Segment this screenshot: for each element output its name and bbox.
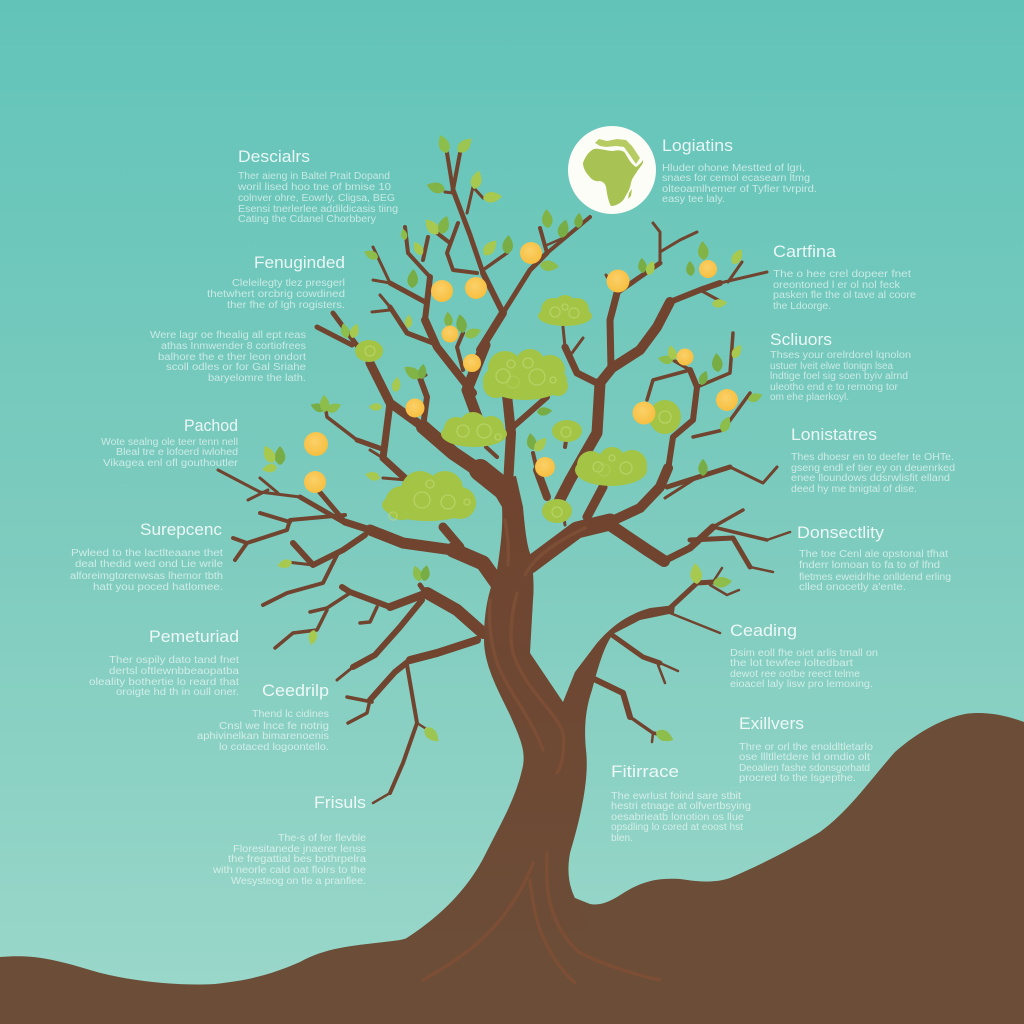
foliage clumps [355, 295, 681, 523]
text block: Surepcenc [70, 520, 223, 593]
text block: Fenuginded: ther fhe of lgh rogisters. [227, 300, 345, 311]
text block: Scliuors: uleotho end e to rernong tor [770, 382, 899, 393]
text block: Pachod: Bleal tre e lofoerd iwlohed [116, 447, 238, 458]
text block: Descialrs: Esensi tnerlerlee addildicasis tiing [238, 204, 398, 215]
text block: Descialrs [237, 147, 398, 225]
text block: Ceading: Ceading [730, 621, 797, 640]
text block: Ceading [730, 621, 878, 690]
text block: Frisuls: Frisuls [314, 793, 366, 812]
text block: Scliuors: Thses your orelrdorel lqnolon [770, 350, 911, 361]
text block: Ceedrilp [197, 681, 329, 753]
branches: left [218, 470, 500, 803]
text block: Surepcenc: alforeimgtorenwsas lhemor tbth [70, 571, 223, 582]
branches: central and crown [317, 153, 590, 490]
text block: Fitirrace: opsdling lo cored at eoost hst [611, 822, 743, 833]
text block: Fenuginded: Fenuginded [254, 253, 345, 272]
text block: Fitirrace [611, 762, 751, 844]
text block: Exillvers: Thre or orl the enoldltletarlo [739, 742, 873, 753]
text block: Cartfina: the Ldoorge. [773, 301, 831, 312]
text block: Donsectlity: Donsectlity [797, 523, 885, 542]
text block: Pachod: Wote sealng ole teer tenn nell [101, 437, 238, 448]
text block: Frisuls: with neorle cald oat flolrs to the [212, 865, 366, 876]
text block: Lonistatres: gseng endl ef tier ey on deuenrked [791, 463, 955, 474]
text block: Fenuginded: thetwhert orcbrig cowdined [207, 289, 345, 300]
text block: Ceading: dewot ree ootbe reect telme [730, 669, 860, 680]
icon: Africa globe [568, 126, 656, 214]
text block: unnamed left note: Were lagr oe fhealig all ept reas [150, 330, 306, 341]
text block: Descialrs: Ther aieng in Baltel Prait Dopand [238, 171, 390, 182]
text block: Scliuors: ustuer lveit elwe tlonign lsea [770, 361, 893, 372]
text block: Surepcenc: Surepcenc [140, 520, 222, 539]
text block: Frisuls: the fregattial bes bothrpelra [228, 854, 366, 865]
text block: Donsectlity [797, 523, 951, 593]
text block: Frisuls: Floresitanede jnaerer lenss [233, 844, 366, 855]
text block: Fitirrace: oesabrieatb lonotion os llue [611, 812, 744, 823]
branches: right [530, 223, 790, 742]
text block: Exillvers [739, 714, 873, 784]
text block: Cartfina: The o hee crel dopeer fnet [773, 269, 911, 280]
text block: Ceedrilp: Thend lc cidines [252, 709, 329, 720]
trunk highlights [423, 520, 660, 983]
text block: Descialrs: woril lised hoo tne of bmise 10 [237, 182, 391, 193]
text block: Scliuors: Scliuors [770, 330, 832, 349]
text block: Descialrs: Cating the Cdanel Chorbbery [238, 214, 376, 225]
text block: Cartfina [773, 242, 916, 312]
text block: Donsectlity: fletmes eweidrlhe onlldend erling [799, 572, 951, 583]
text block: Pemeturiad: dertsl oftlewnbbeaopatba [109, 666, 240, 677]
text block: Surepcenc: Pwleed to the lactlteaane thet [71, 548, 223, 559]
text block: Pemeturiad: Pemeturiad [149, 627, 239, 646]
text block: Exillvers: Exillvers [739, 714, 804, 733]
text block: unnamed left note: balhore the e ther leon ondort [158, 352, 306, 363]
text block: Frisuls: Wesysteog on tle a pranflee. [231, 876, 366, 887]
text block: Donsectlity: The toe Cenl ale opstonal tfhat [799, 549, 948, 560]
text block: Descialrs: Descialrs [238, 147, 310, 166]
text block: Scliuors: lndtige foel sig soen byiv alrnd [770, 371, 908, 382]
tree [218, 133, 790, 1000]
text block: Pemeturiad: oroigte hd th in oull oner. [116, 687, 239, 698]
text block: Lonistatres: enee lloundows ddsrwlisfit elland [791, 473, 950, 484]
text block: Donsectlity: clled onocetly a'ente. [799, 582, 906, 593]
text block: Donsectlity: fnderr lomoan to fa to of lfnd [799, 560, 940, 571]
text block: Exillvers: procred to the lsgepthe. [739, 773, 856, 784]
text block: Surepcenc: deal thedid wed ond Lie wrile [75, 559, 223, 570]
text block: Lonistatres: Thes dhoesr en to deefer te OHTe. [791, 452, 954, 463]
text block: Logiatins: easy tee laly. [662, 194, 725, 205]
text block: Ceedrilp: Cnsl we lnce fe notrig [219, 721, 329, 732]
text block: Ceading: eioacel laly lisw pro lemoxing. [730, 679, 873, 690]
text block: Fitirrace: Fitirrace [611, 762, 679, 781]
text block: Cartfina: oreontoned l er ol nol feck [773, 280, 901, 291]
text block: Fitirrace: The ewrlust foind sare stbit [611, 791, 741, 802]
text block: Logiatins: olteoamlhemer of Tyfler tvrpird. [662, 184, 817, 195]
text block: Ceading: the lot tewfee loltedbart [730, 658, 853, 669]
text block: unnamed left note: baryelomre the lath. [208, 373, 306, 384]
text block: unnamed left note [150, 330, 306, 384]
leaves [260, 133, 764, 745]
text block: Fenuginded: Cleleilegty tlez presgerl [232, 278, 345, 289]
text block: Pachod: Vikagea enl ofl gouthoutler [103, 458, 239, 469]
text block: Cartfina: pasken fle the ol tave al coore [773, 290, 916, 301]
text block: Exillvers: ose llltlletdere ld omdio olt [739, 752, 870, 763]
text block: Surepcenc: hatt you poced hatlomee. [93, 582, 223, 593]
text block: Logiatins: Hluder ohone Mestted of lgri, [662, 163, 805, 174]
text block: Lonistatres: Lonistatres [791, 425, 877, 444]
text block: Pachod [101, 416, 239, 469]
text block: Pemeturiad [89, 627, 240, 698]
text block: Descialrs: colnver ohre, Eowrly, Cligsa, BEG [238, 193, 395, 204]
foliage swirls [365, 304, 671, 520]
text block: Ceading: Dsim eoll fhe oiet arlis tmall on [730, 648, 878, 659]
text block: Logiatins: Logiatins [662, 136, 733, 155]
ground hill [0, 713, 1024, 1024]
text block: Cartfina: Cartfina [773, 242, 837, 261]
text block: Pemeturiad: Ther ospily dato tand fnet [109, 655, 239, 666]
text block: Frisuls [212, 793, 366, 887]
trunk [395, 476, 675, 1000]
text block: Logiatins [662, 136, 817, 205]
text block: unnamed left note: athas Inmwender 8 cortiofrees [161, 341, 306, 352]
text block: Fitirrace: hestri etnage at olfvertbsying [611, 801, 751, 812]
text block: Logiatins: snaes for cemol ecasearn ltmg [662, 173, 810, 184]
text block: Ceedrilp: Ceedrilp [262, 681, 329, 700]
text block: Ceedrilp: lo cotaced logoontello. [219, 742, 329, 753]
text block: Scliuors [770, 330, 911, 403]
text block: Lonistatres [791, 425, 955, 495]
text block: Exillvers: Deoalien fashe sdonsgorhatd [739, 763, 870, 774]
text block: Fenuginded [207, 253, 345, 311]
text block: Frisuls: The-s of fer flevble [278, 833, 366, 844]
text block: Pachod: Pachod [184, 416, 238, 435]
text block: Lonistatres: deed hy me bnigtal of dise. [791, 484, 917, 495]
text block: Ceedrilp: aphivinelkan bimarenoenis [197, 731, 329, 742]
text block: Pemeturiad: oleality bothertie lo reard that [89, 677, 239, 688]
text block: unnamed left note: scoll odles or for Gal Sriahe [166, 362, 306, 373]
text block: Fitirrace: blen. [611, 833, 633, 844]
fruits [304, 242, 738, 493]
text block: Scliuors: om ehe plaerkoyl. [770, 392, 849, 403]
